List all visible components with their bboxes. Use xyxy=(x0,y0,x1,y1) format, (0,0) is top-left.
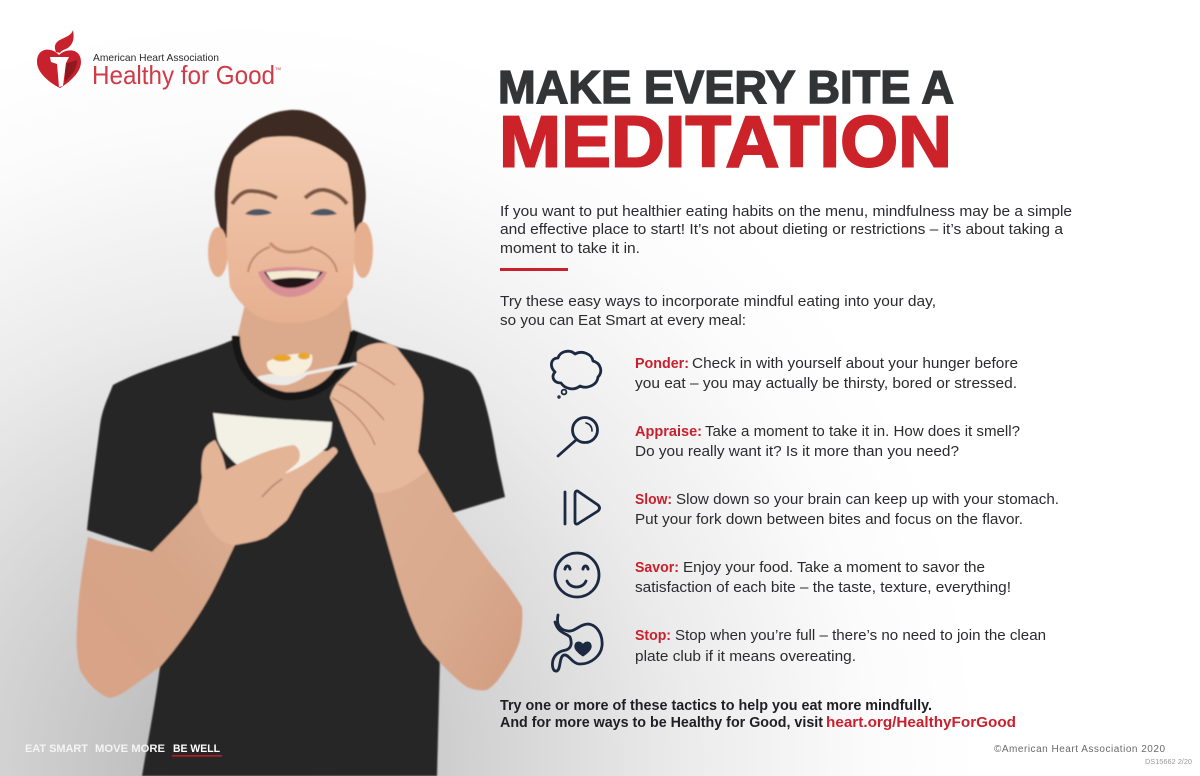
savor text: Enjoy your food. Take a moment to savor the xyxy=(683,560,985,576)
eyebrows xyxy=(232,191,277,204)
Healthy for Good text: Healthy for Good xyxy=(92,60,275,90)
face xyxy=(227,136,355,323)
fingers over bowl xyxy=(226,445,338,525)
icon: slow play xyxy=(565,491,600,524)
finger creases on right hand xyxy=(332,362,395,445)
appraise text xyxy=(635,424,1020,460)
mouth xyxy=(258,267,327,297)
closing call to action: heart.org/HealthyForGood xyxy=(826,715,1016,731)
closing call to action xyxy=(500,698,1016,731)
lead-in text xyxy=(500,294,936,329)
finger crease on left hand xyxy=(262,479,282,497)
photo: man eating from a bowl xyxy=(77,110,522,776)
ponder text xyxy=(635,356,1018,392)
copyright: ©American Heart Association 2020 xyxy=(994,744,1165,755)
ponder text: Check in with yourself about your hunger before xyxy=(692,356,1018,372)
intro paragraph: and effective place to start! It’s not about dieting or restrictions – it’s about taking a xyxy=(500,222,1064,238)
right arm xyxy=(373,452,522,690)
ears xyxy=(208,227,228,277)
closing call to action: And for more ways to be Healthy for Good, visit xyxy=(500,715,823,731)
intro paragraph xyxy=(500,204,1072,257)
smile lines xyxy=(248,247,337,272)
American Heart Association text: American Heart Association xyxy=(93,52,219,64)
savor text: satisfaction of each bite – the taste, texture, everything! xyxy=(635,580,1011,596)
appraise text: Appraise: xyxy=(635,424,702,440)
tip: ponder xyxy=(551,351,1018,398)
icon: thought cloud xyxy=(551,351,601,398)
document code: DS15662 2/20 xyxy=(1145,759,1192,766)
hair xyxy=(215,110,366,240)
intro paragraph: If you want to put healthier eating habits on the menu, mindfulness may be a simple xyxy=(500,204,1072,220)
spoon xyxy=(257,362,357,385)
tagline: eat smart, move more, be well: MOVE MORE xyxy=(95,743,165,755)
closing call to action: Try one or more of these tactics to help you eat more mindfully. xyxy=(500,698,932,714)
logo: American Heart Association Healthy for Good xyxy=(37,30,281,90)
tip: savor xyxy=(555,553,1011,597)
stop text xyxy=(635,628,1046,665)
trademark: TM xyxy=(275,66,281,71)
icon: heart and torch xyxy=(37,30,81,88)
slow text: Slow down so your brain can keep up with your stomach. xyxy=(676,492,1059,508)
icon: stomach with heart xyxy=(552,615,602,671)
bowl xyxy=(213,413,332,473)
t-shirt xyxy=(87,330,505,776)
tagline: eat smart, move more, be well: EAT SMART xyxy=(25,743,88,755)
title xyxy=(498,61,954,182)
eyes xyxy=(245,209,272,215)
right hand xyxy=(330,343,428,493)
left arm xyxy=(77,500,235,698)
stop text: Stop: xyxy=(635,628,671,644)
food on spoon xyxy=(267,354,312,376)
red divider rule xyxy=(500,268,568,271)
tip: appraise xyxy=(558,418,1020,460)
stop text: Stop when you’re full – there’s no need to join the clean xyxy=(675,628,1046,644)
tagline: eat smart, move more, be well xyxy=(25,743,222,757)
stop text: plate club if it means overeating. xyxy=(635,649,856,665)
title line two: MEDITATION xyxy=(499,102,952,182)
appraise text: Do you really want it? Is it more than you need? xyxy=(635,444,959,460)
slow text: Put your fork down between bites and focus on the flavor. xyxy=(635,512,1023,528)
savor text: Savor: xyxy=(635,560,679,576)
tip: stop xyxy=(552,615,1046,671)
tagline: eat smart, move more, be well: BE WELL xyxy=(173,743,220,755)
icon: smiley face xyxy=(555,553,599,597)
savor text xyxy=(635,560,1011,596)
nose shading xyxy=(270,243,313,252)
collar xyxy=(236,332,354,396)
slow text xyxy=(635,492,1059,528)
slow text: Slow: xyxy=(635,492,672,508)
intro paragraph: moment to take it in. xyxy=(500,241,640,257)
neck xyxy=(237,290,352,393)
left hand xyxy=(198,440,337,545)
appraise text: Take a moment to take it in. How does it smell? xyxy=(705,424,1020,440)
ponder text: Ponder: xyxy=(635,356,689,372)
tip: slow xyxy=(565,491,1059,528)
ponder text: you eat – you may actually be thirsty, bored or stressed. xyxy=(635,376,1017,392)
icon: magnifying glass xyxy=(558,418,598,456)
title line one: MAKE EVERY BITE A xyxy=(498,61,954,113)
lead-in text: so you can Eat Smart at every meal: xyxy=(500,313,746,329)
lead-in text: Try these easy ways to incorporate mindful eating into your day, xyxy=(500,294,936,310)
